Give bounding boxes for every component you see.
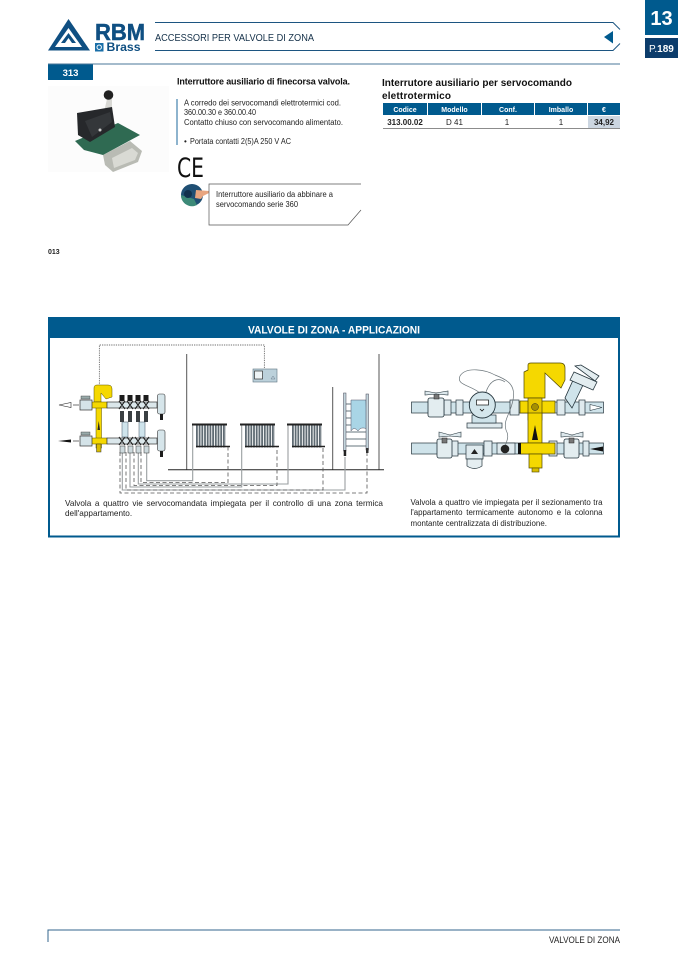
gauge — [501, 445, 509, 453]
top ball valve — [425, 391, 448, 417]
bottom left ball valve — [437, 432, 461, 458]
cable — [459, 370, 514, 447]
description block: Contatto chiuso con servocomando alimentato. — [184, 118, 343, 127]
callout box: servocomando serie 360 — [216, 200, 299, 209]
icon: CE mark: CE — [177, 153, 204, 184]
header title: ACCESSORI PER VALVOLE DI ZONA — [155, 33, 314, 44]
table heading: elettrotermico — [382, 91, 451, 102]
towel rail radiator — [344, 393, 368, 456]
product heading: Interruttore ausiliario di finecorsa valvola. — [177, 76, 350, 86]
price table: 34,92 — [594, 118, 615, 127]
icon: pointing hand badge — [181, 184, 209, 206]
diagram: valve assembly — [412, 363, 604, 472]
price table: Codice — [393, 107, 417, 114]
table heading — [382, 78, 572, 102]
price table: Conf. — [499, 107, 517, 114]
manifold — [107, 394, 165, 457]
flow arrows — [590, 404, 603, 452]
inlet arrows and ball valves — [58, 396, 92, 446]
strainer — [565, 365, 599, 408]
callout box: Interruttore ausiliario da abbinare a — [216, 190, 334, 199]
price table: D 41 — [446, 118, 463, 127]
radiator 1 — [192, 424, 230, 446]
page tab P.189 — [645, 38, 678, 58]
icon: thermostat — [253, 369, 277, 382]
radiator 2 — [240, 424, 279, 446]
fittings — [444, 400, 589, 456]
description block: Portata contatti 2(5)A 250 V AC — [190, 137, 291, 146]
pump — [467, 392, 502, 428]
right caption: Valvola a quattro vie impiegata per il sezionamento tra — [410, 498, 602, 507]
filter — [466, 445, 483, 468]
panel: applicazioni: VALVOLE DI ZONA - APPLICAZIONI — [248, 324, 420, 336]
right caption: montante centralizzata di distribuzione. — [410, 519, 547, 528]
logo: RBM Brass: Brass — [106, 42, 140, 54]
table heading: Interrutore ausiliario per servocomando — [382, 78, 572, 89]
footer label: VALVOLE DI ZONA — [549, 935, 620, 945]
right caption — [410, 498, 602, 528]
chapter tab 13 — [645, 0, 678, 35]
description block: • — [184, 137, 187, 146]
left caption: Valvola a quattro vie servocomandata impiegata per il controllo di una zona termica dell'appartamento. — [65, 498, 383, 518]
footer frame — [48, 930, 620, 942]
four-way valve — [92, 385, 112, 452]
pipes — [412, 402, 604, 454]
logo: RBM Brass: RBM — [95, 19, 145, 45]
price table: 1 — [559, 118, 564, 127]
yellow valve — [518, 363, 565, 472]
return pipes — [120, 447, 367, 493]
radiator 3 — [287, 424, 325, 446]
section tab 313 — [48, 64, 93, 80]
section rule — [48, 63, 620, 65]
code 013: 013 — [48, 249, 60, 256]
description block — [177, 98, 343, 146]
header frame with arrow — [155, 22, 620, 50]
callout box — [209, 184, 361, 225]
price table: € — [602, 107, 606, 114]
chapter tab 13: 13 — [650, 8, 673, 30]
walls and floor — [168, 354, 384, 470]
right caption: l'appartamento termicamente autonomo e la colonna — [410, 508, 602, 517]
price table: Imballo — [549, 107, 573, 114]
price table: 1 — [505, 118, 510, 127]
supply pipes — [122, 425, 345, 490]
description block: 360.00.30 e 360.00.40 — [184, 108, 256, 117]
section tab 313: 313 — [63, 68, 78, 79]
price table: 313.00.02 — [387, 118, 423, 127]
product photo: auxiliary switch — [48, 86, 169, 172]
description block: A corredo dei servocomandi elettrotermici cod. — [184, 98, 341, 108]
diagram: heating system — [58, 345, 384, 493]
panel: applicazioni — [48, 317, 620, 536]
page tab P.189: P.189 — [649, 44, 674, 55]
logo: RBM Brass — [48, 19, 145, 54]
price table — [383, 103, 620, 128]
price table: Modello — [441, 107, 468, 114]
control wire — [99, 345, 264, 386]
bottom right ball valve — [561, 432, 583, 458]
